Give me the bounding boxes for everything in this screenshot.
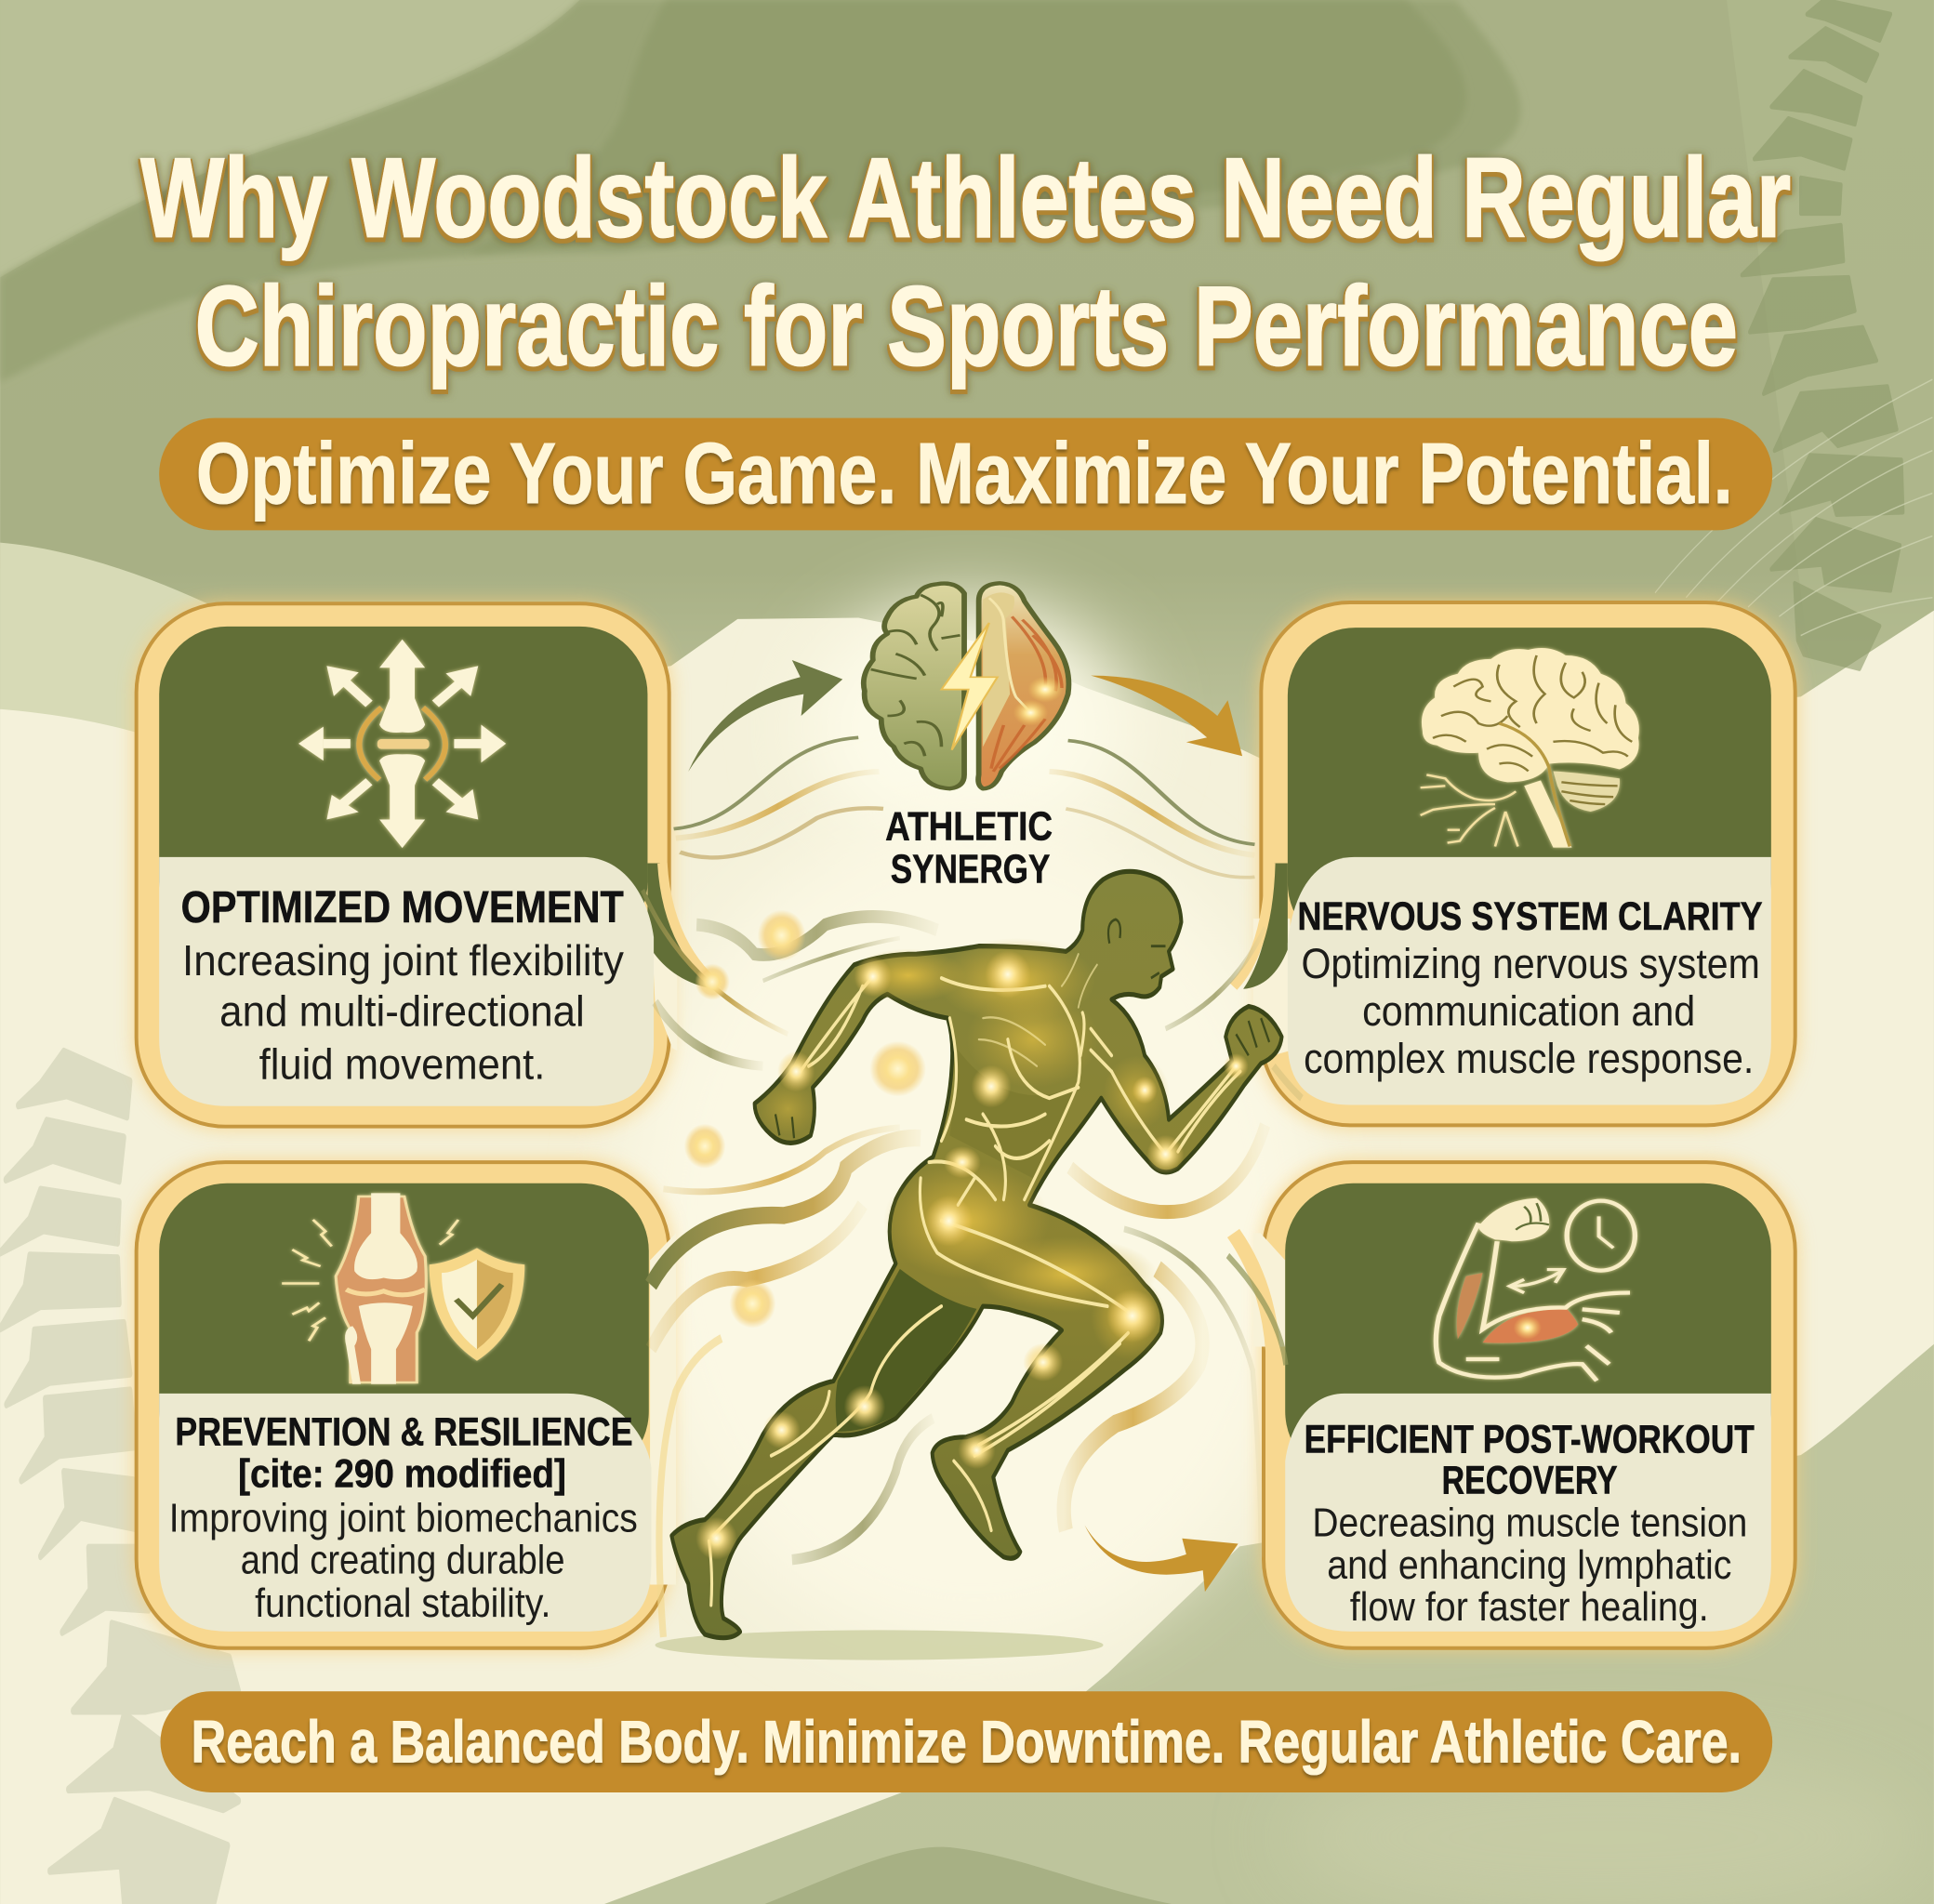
text: nervous system clarity: communication and (1362, 987, 1695, 1035)
text: efficient post-workout recovery (1305, 1418, 1755, 1630)
text: nervous system clarity: NERVOUS SYSTEM CLARITY (1297, 894, 1763, 938)
bottom banner (161, 1691, 1772, 1792)
text: nervous system clarity: complex muscle response. (1304, 1035, 1754, 1082)
text: efficient post-workout recovery: Decreasing muscle tension (1312, 1501, 1747, 1546)
runner figure (671, 871, 1281, 1638)
panel: prevention and resilience (136, 1161, 676, 1648)
athletic synergy cluster (674, 583, 1254, 878)
text: optimized movement: Increasing joint flexibility (182, 936, 625, 985)
runner head details (775, 919, 1269, 1138)
icon: knee joint and shield (282, 1193, 524, 1384)
icon: brain and muscle (864, 583, 1068, 788)
text: efficient post-workout recovery: flow for faster healing. (1350, 1584, 1709, 1630)
text: prevention and resilience: Improving joint biomechanics (169, 1495, 638, 1540)
text: optimized movement: OPTIMIZED MOVEMENT (181, 883, 624, 932)
text: prevention and resilience: functional stability. (255, 1580, 550, 1626)
energy flows around runner (642, 890, 1302, 1660)
text: optimized movement: fluid movement. (259, 1040, 545, 1089)
text: prevention and resilience: and creating durable (241, 1538, 565, 1583)
text: nervous system clarity: Optimizing nervous system (1301, 940, 1760, 987)
text: efficient post-workout recovery: RECOVERY (1442, 1458, 1618, 1501)
runner body silhouette (671, 871, 1281, 1638)
label: athletic synergy: ATHLETIC (885, 803, 1053, 849)
text: prevention and resilience: PREVENTION & RESILIENCE (175, 1410, 633, 1454)
arrow: to nervous panel (1091, 676, 1242, 756)
runner glow points (695, 950, 1249, 1560)
label: athletic synergy: SYNERGY (891, 847, 1050, 892)
text: prevention and resilience: [cite: 290 modified] (238, 1452, 566, 1496)
runner muscle shading (759, 938, 1170, 1432)
text: efficient post-workout recovery: and enhancing lymphatic (1327, 1542, 1731, 1588)
flow lines to panels (674, 737, 1254, 878)
panel: efficient post-workout recovery (1234, 1161, 1795, 1648)
spine silhouette: lower left (0, 1051, 239, 1904)
spine silhouette: upper right (1655, 0, 1932, 668)
arrow: to brain (688, 660, 842, 772)
icon: joint with eight arrows (298, 640, 506, 848)
text: prevention and resilience (169, 1410, 638, 1626)
text: optimized movement: and multi-directional (219, 987, 585, 1036)
panel: optimized movement (136, 603, 718, 1127)
icon: flexed arm and clock (1436, 1198, 1635, 1381)
icon: brain and nerves (1421, 648, 1639, 848)
text: efficient post-workout recovery: EFFICIENT POST-WORKOUT (1305, 1418, 1755, 1461)
title (140, 135, 1791, 390)
label: athletic synergy (885, 803, 1053, 892)
panel: nervous system clarity (1234, 602, 1795, 1126)
text: nervous system clarity (1297, 894, 1763, 1082)
text: optimized movement (181, 883, 625, 1089)
runner nerve lines (709, 954, 1240, 1605)
